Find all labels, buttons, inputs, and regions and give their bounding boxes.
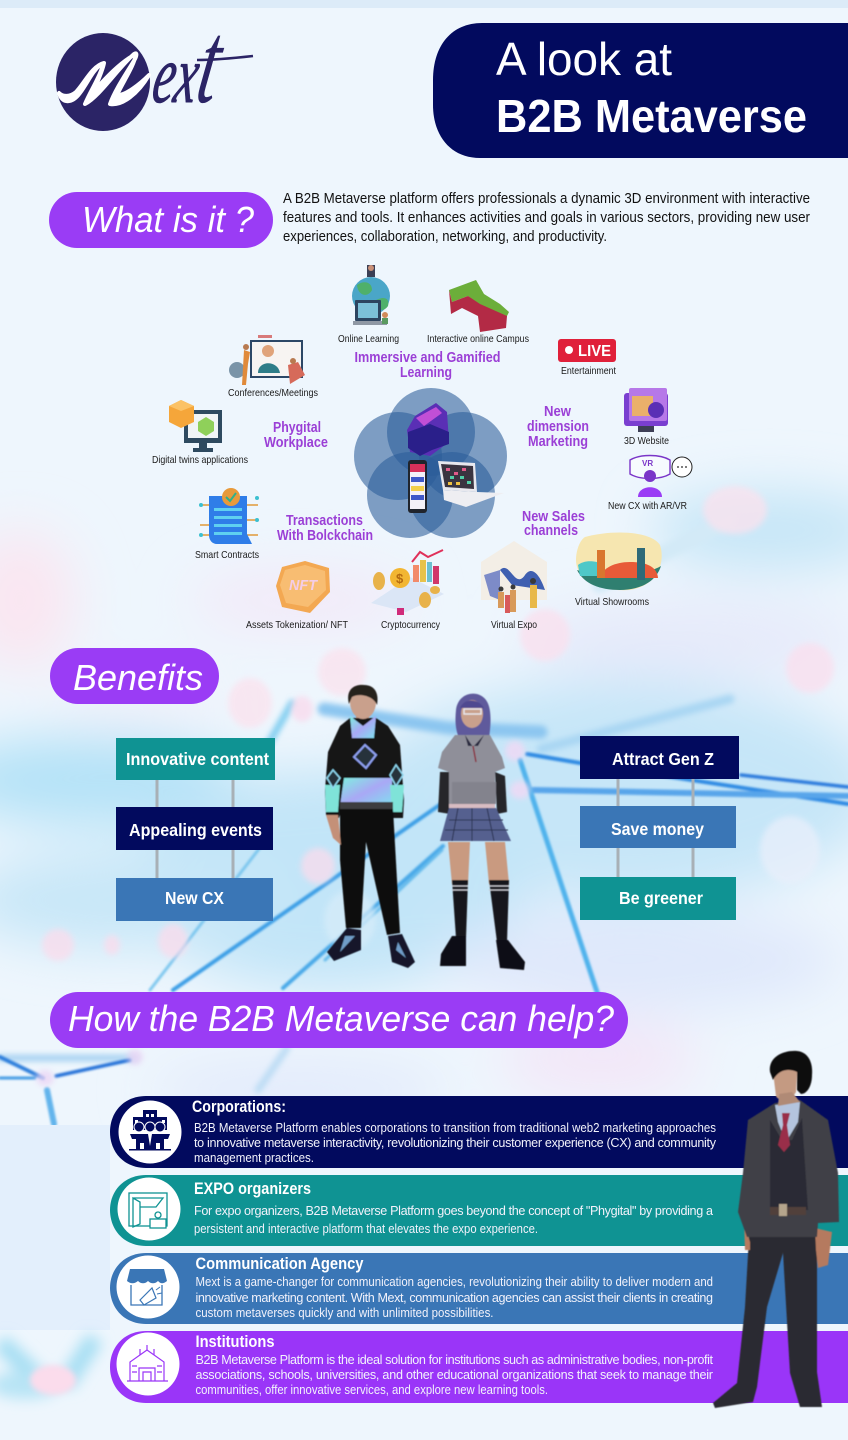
item: New CX with AR/VR <box>608 456 692 512</box>
panel: Corporations: B2B Metaverse Platform enables corporations to transition from traditional web2 marketing approaches <box>194 1121 716 1135</box>
box: Appealing events <box>116 807 273 850</box>
lower-left background patch <box>0 1125 110 1330</box>
title banner: B2B Metaverse <box>496 90 807 142</box>
icon: VR headset <box>407 403 449 456</box>
box: Be greener: Be greener <box>619 888 703 908</box>
box: Attract Gen Z: Attract Gen Z <box>612 749 714 769</box>
panel: Communication Agency <box>110 1253 848 1324</box>
item: Assets Tokenization/ NFT: Assets Tokenization/ NFT <box>246 619 348 631</box>
category: Transactions With Bolckchain <box>277 513 373 544</box>
item: Cryptocurrency: Cryptocurrency <box>381 619 441 631</box>
item: Online Learning: Online Learning <box>338 333 399 345</box>
item: Virtual Expo: Virtual Expo <box>491 619 537 631</box>
item: Assets Tokenization/ NFT: NFT <box>289 577 319 594</box>
item: LIVE Entertainment: Entertainment <box>561 365 616 377</box>
panel: Institutions: associations, schools, universities, and other educational organizations that seek to manage their <box>196 1368 713 1382</box>
panel: Institutions: B2B Metaverse Platform is the ideal solution for institutions such as administrative bodies, non-profit <box>196 1353 714 1367</box>
item: New CX with AR/VR: New CX with AR/VR <box>608 500 687 512</box>
item: New CX with AR/VR: VR <box>642 459 653 468</box>
avatar: man in hoodie <box>325 685 415 968</box>
heading pill: How the B2B Metaverse can help?: How the B2B Metaverse can help? <box>68 998 614 1039</box>
category: Immersive and Gamified Learning: Immersive and Gamified <box>354 350 500 366</box>
category: Transactions With Bolckchain: With Bolckchain <box>277 528 373 544</box>
box: Save money <box>580 806 736 848</box>
item: Interactive online Campus: Interactive online Campus <box>427 333 529 345</box>
item: 3D Website: 3D Website <box>624 435 669 447</box>
category: New Sales channels <box>522 509 585 539</box>
panel: Institutions <box>110 1331 848 1403</box>
benefits right column <box>580 736 739 920</box>
category: Phygital Workplace: Phygital <box>273 420 321 436</box>
box: New CX: New CX <box>165 888 224 908</box>
category: Immersive and Gamified Learning <box>354 350 500 381</box>
box: Be greener <box>580 877 736 920</box>
category: Transactions With Bolckchain: Transactions <box>286 513 363 529</box>
item: Conferences/Meetings: Conferences/Meetings <box>228 387 318 399</box>
panel: Communication Agency: Communication Agency <box>196 1254 364 1273</box>
panel: Corporations: Corporations: <box>192 1097 286 1116</box>
icon: corporate building with people <box>129 1110 171 1150</box>
panel: Corporations: management practices. <box>194 1151 314 1165</box>
title banner <box>433 23 848 158</box>
avatar: woman in grey hoodie <box>438 694 525 970</box>
item: Digital twins applications <box>152 400 248 466</box>
item: Cryptocurrency <box>371 550 444 631</box>
item: LIVE Entertainment: LIVE <box>578 343 611 360</box>
item: Smart Contracts <box>195 488 259 561</box>
intro paragraph: experiences, collaboration, networking, and productivity. <box>283 229 607 245</box>
item: Digital twins applications: Digital twins applications <box>152 454 248 466</box>
item: Cryptocurrency: $ <box>396 571 404 586</box>
category: New dimension Marketing: Marketing <box>528 434 588 450</box>
category: Phygital Workplace <box>264 420 328 451</box>
logo: Mext: ext <box>145 0 234 128</box>
box: New CX <box>116 878 273 921</box>
panel: EXPO organizers: persistent and interactive platform that elevates the expo experience. <box>194 1222 538 1236</box>
intro paragraph: features and tools. It enhances activities and goals in various sectors, providing new user <box>283 210 810 226</box>
panel: EXPO organizers: EXPO organizers <box>194 1179 311 1198</box>
panel: Institutions: communities, offer innovative services, and explore new learning tools. <box>196 1383 548 1397</box>
category: New Sales channels: channels <box>524 523 578 539</box>
box: Appealing events: Appealing events <box>129 820 262 840</box>
item: Online Learning <box>338 265 399 345</box>
panel: EXPO organizers: For expo organizers, B2B Metaverse Platform goes beyond the concept of "Phygital" by providing a <box>194 1204 713 1218</box>
icon: phone <box>408 460 427 513</box>
item: LIVE Entertainment <box>558 339 616 377</box>
logo: Mext <box>56 0 253 131</box>
panel: EXPO organizers <box>110 1175 848 1246</box>
heading pill: Benefits: Benefits <box>73 657 203 698</box>
heading pill: Benefits <box>50 648 219 704</box>
item: Smart Contracts: Smart Contracts <box>195 549 259 561</box>
category: New dimension Marketing <box>527 404 589 450</box>
box: Save money: Save money <box>611 819 704 839</box>
item: Virtual Showrooms <box>575 532 662 608</box>
icon: expo booth <box>129 1193 167 1228</box>
panel: Corporations <box>110 1096 848 1168</box>
category: Phygital Workplace: Workplace <box>264 435 328 451</box>
heading pill: What is it ?: What is it ? <box>82 199 254 240</box>
panel: Communication Agency: innovative marketing content. With Mext, communication agencies can assist their clients in creating <box>196 1291 713 1305</box>
box: Attract Gen Z <box>580 736 739 779</box>
intro paragraph: A B2B Metaverse platform offers professionals a dynamic 3D environment with interactive <box>283 191 810 207</box>
venn diagram with devices <box>354 388 507 538</box>
icon: storefront with megaphone <box>127 1269 167 1305</box>
box: Innovative content <box>116 738 275 780</box>
item: Virtual Showrooms: Virtual Showrooms <box>575 596 649 608</box>
panel: Corporations: to innovative metaverse interactivity, revolutionizing their customer experience (CX) and community <box>194 1136 717 1150</box>
panel: Institutions: Institutions <box>196 1332 274 1351</box>
item: 3D Website <box>624 388 669 447</box>
item: Conferences/Meetings <box>228 335 318 399</box>
category: New dimension Marketing: dimension <box>527 419 589 435</box>
icon: institution building <box>127 1345 168 1381</box>
category: New dimension Marketing: New <box>544 404 572 420</box>
panel: Communication Agency: custom metaverses quickly and with unlimited possibilities. <box>196 1306 494 1320</box>
item: Virtual Expo <box>481 541 547 631</box>
panel: Communication Agency: Mext is a game-changer for communication agencies, revolutionizing their ability to deliver modern and <box>196 1275 713 1289</box>
item: Interactive online Campus <box>427 280 529 345</box>
category: New Sales channels: New Sales <box>522 509 585 525</box>
icon: laptop <box>438 461 504 507</box>
benefits left column <box>116 738 275 921</box>
heading pill: What is it ? <box>49 192 273 248</box>
intro paragraph <box>283 191 810 245</box>
item: Assets Tokenization/ NFT <box>246 561 348 631</box>
avatar: man in suit <box>713 1051 839 1408</box>
box: Innovative content: Innovative content <box>126 749 269 769</box>
title banner: A look at <box>496 33 672 85</box>
category: Immersive and Gamified Learning: Learning <box>400 365 452 381</box>
